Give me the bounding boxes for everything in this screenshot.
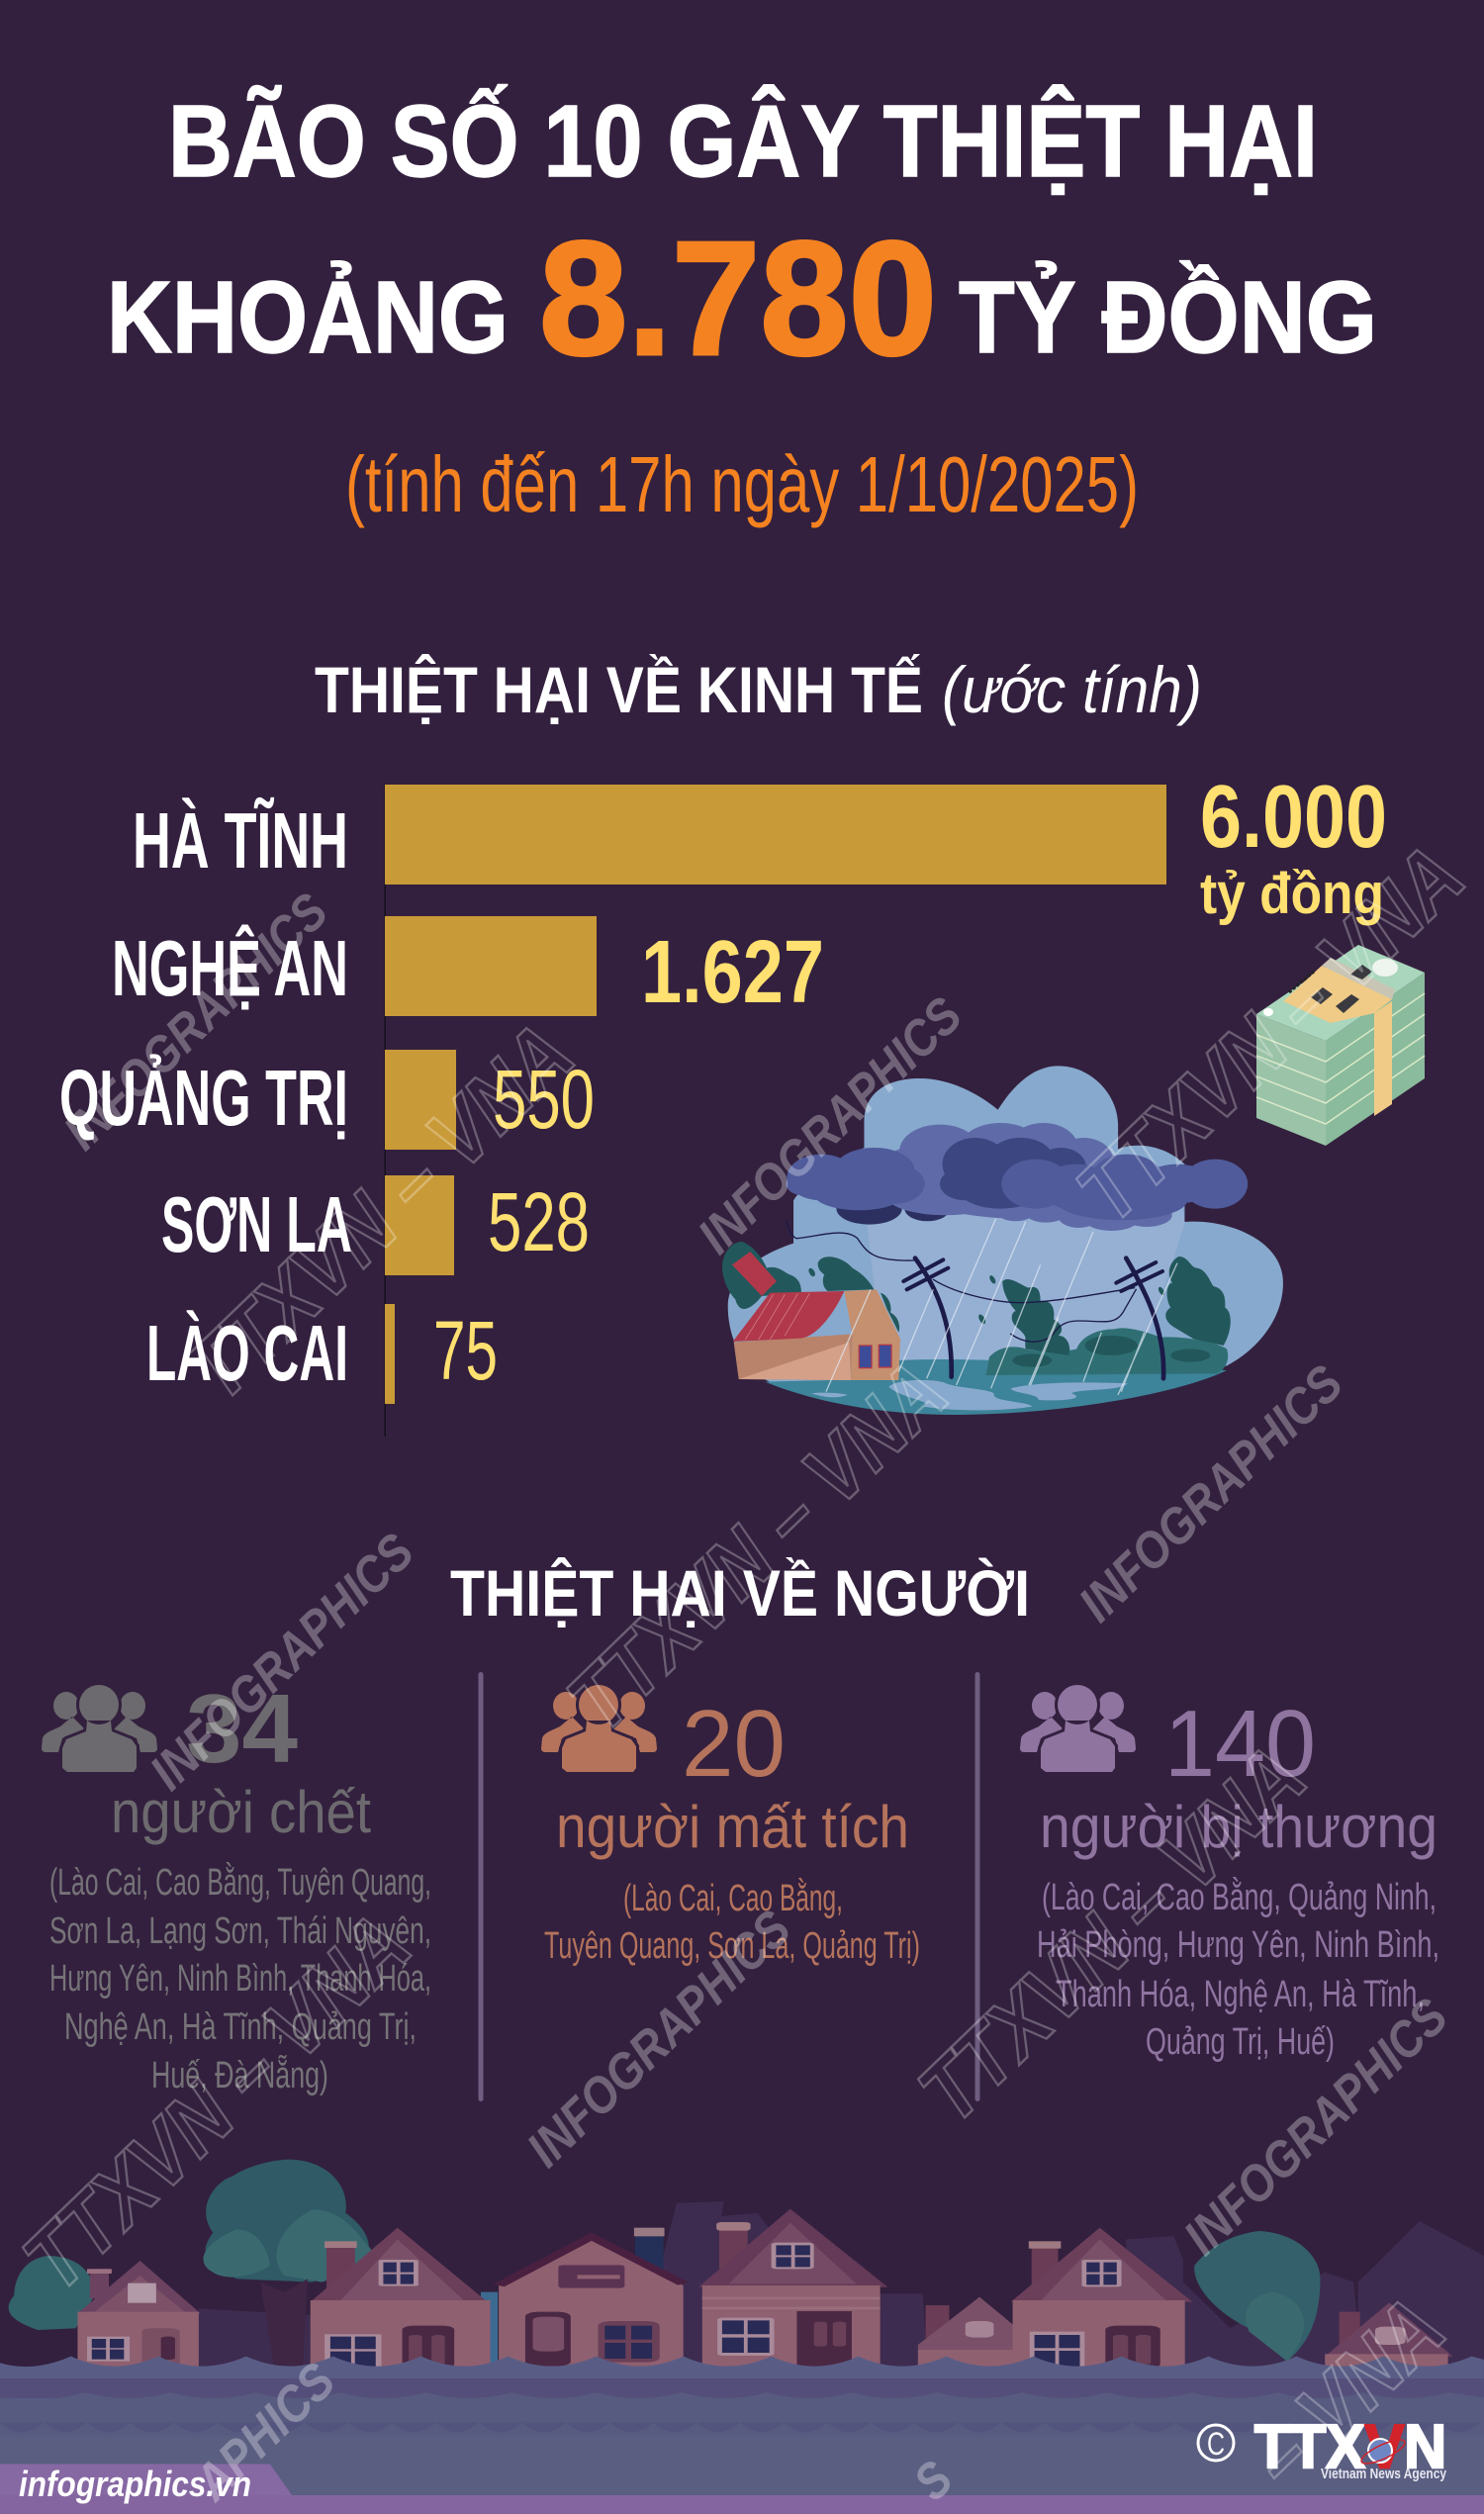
chart axis xyxy=(384,785,386,1437)
panel: missing xyxy=(541,1685,920,1967)
watermarks: INFOGRAPHICS xyxy=(139,1523,425,1802)
puddles xyxy=(811,1380,1128,1410)
label: deaths: người chết xyxy=(111,1779,371,1845)
sky blob xyxy=(728,1066,1283,1413)
background silhouettes xyxy=(199,2201,1484,2368)
province list: deaths xyxy=(49,1861,431,2096)
bar: Sơn La: 528 xyxy=(488,1175,590,1268)
watermarks: – VNA xyxy=(1231,2279,1463,2507)
label: missing: người mất tích xyxy=(556,1794,909,1860)
bar: Nghệ An: NGHỆ AN xyxy=(112,924,348,1012)
heading estimate note: (ước tính) xyxy=(942,653,1202,726)
house 2 xyxy=(311,2228,491,2368)
footer purple strip xyxy=(0,2495,1484,2514)
icon: people group xyxy=(541,1685,657,1772)
number: 140: 140 xyxy=(1164,1691,1316,1797)
house 4 xyxy=(698,2209,887,2368)
title highlighted total: 8.780 xyxy=(539,208,937,389)
province list: deaths: (Lào Cai, Cao Bằng, Tuyên Quang, xyxy=(49,1861,431,1904)
province list: deaths: Huế, Đà Nẵng) xyxy=(151,2053,328,2096)
label: injured: người bị thương xyxy=(1040,1794,1438,1860)
number: 20: 20 xyxy=(682,1691,786,1797)
rain xyxy=(826,1219,1177,1395)
province list: deaths: Sơn La, Lạng Sơn, Thái Nguyên, xyxy=(49,1910,431,1952)
heading: human damage: THIỆT HẠI VỀ NGƯỜI xyxy=(450,1556,1030,1629)
province list: missing: Tuyên Quang, Sơn La, Quảng Trị) xyxy=(544,1925,920,1967)
watermarks xyxy=(4,826,1482,2513)
wordmark: TTXVN xyxy=(1254,2413,1446,2481)
blue accent between houses xyxy=(481,2292,498,2367)
icon: people group xyxy=(1020,1685,1136,1772)
watermarks: TTXVN – VNA xyxy=(4,1895,428,2309)
column divider 1 xyxy=(479,1672,483,2101)
house xyxy=(732,1252,900,1380)
title line 2: khoảng: KHOẢNG xyxy=(107,260,509,374)
illustration: storm over flooded house xyxy=(722,1066,1283,1415)
subtitle date: (tính đến 17h ngày 1/10/2025) xyxy=(345,440,1139,528)
bar: Quảng Trị: QUẢNG TRỊ xyxy=(59,1054,348,1142)
watermarks: TTXVN – VNA xyxy=(899,1726,1324,2141)
illustration: flooded village xyxy=(0,2160,1484,2514)
storm clouds xyxy=(786,1123,1248,1231)
bar: Sơn La: SƠN LA xyxy=(161,1180,352,1268)
watermarks: INFOGRAPHICS xyxy=(516,1900,802,2179)
province list: injured: Quảng Trị, Huế) xyxy=(1146,2021,1335,2063)
province list: deaths: Hưng Yên, Ninh Bình, Thanh Hóa, xyxy=(49,1958,431,2000)
heading: economic damage xyxy=(315,653,1202,726)
watermarks: INFOGRAPHICS xyxy=(688,986,974,1265)
watermarks: INFOGRAPHICS xyxy=(53,883,339,1162)
heading text: THIỆT HẠI VỀ KINH TẾ xyxy=(315,653,923,726)
house 1 xyxy=(77,2261,201,2368)
number: 34: 34 xyxy=(186,1674,298,1783)
globe emblem xyxy=(1358,2436,1408,2467)
bar: Quảng Trị: 550 xyxy=(493,1053,595,1146)
flood water xyxy=(0,2357,1484,2514)
watermarks: TTXVN – VNA xyxy=(167,1004,592,1419)
bar chart: economic damage by province xyxy=(59,768,1387,1437)
bar: Sơn La xyxy=(161,1175,590,1275)
bar: Nghệ An: 1.627 xyxy=(641,923,824,1022)
panel: injured xyxy=(1020,1685,1439,2063)
copyright mark: C xyxy=(1207,2426,1225,2462)
title line 1: BÃO SỐ 10 GÂY THIỆT HẠI xyxy=(168,84,1318,198)
watermarks: INFOGRAPHICS xyxy=(1068,1354,1354,1633)
copyright mark xyxy=(1198,2425,1234,2462)
watermarks: S xyxy=(903,2451,964,2512)
bar: Hà Tĩnh: 6.000 xyxy=(1200,768,1387,867)
trees xyxy=(9,2160,1320,2368)
bar: Lào Cai: LÀO CAI xyxy=(146,1309,348,1397)
province list: injured xyxy=(1037,1876,1439,2063)
panel: deaths xyxy=(42,1674,431,2096)
title xyxy=(107,84,1377,389)
province list: missing: (Lào Cai, Cao Bằng, xyxy=(623,1877,843,1919)
bar: Hà Tĩnh xyxy=(133,768,1387,926)
column divider 2 xyxy=(975,1672,979,2101)
title line 2: tỷ đồng: TỶ ĐỒNG xyxy=(959,259,1377,374)
house 5 xyxy=(918,2297,1017,2368)
province list: deaths: Nghệ An, Hà Tĩnh, Quảng Trị, xyxy=(64,2006,417,2048)
icon: stack of money xyxy=(1256,945,1425,1146)
bar: Nghệ An xyxy=(112,916,824,1022)
watermarks: APHICS xyxy=(183,2352,346,2513)
ground scene: water, trees, house, poles xyxy=(722,1219,1231,1415)
house 6 xyxy=(1011,2228,1192,2368)
bar: Lào Cai: 75 xyxy=(433,1304,498,1397)
bar: Hà Tĩnh: tỷ đồng xyxy=(1200,862,1384,926)
watermarks: TTXVN – VNA xyxy=(548,1343,966,1750)
bar: Hà Tĩnh: HÀ TĨNH xyxy=(133,796,348,885)
trees and bushes xyxy=(722,1242,1231,1375)
province list: missing xyxy=(544,1877,920,1967)
logo: TTXVN xyxy=(1198,2413,1447,2482)
icon: people group xyxy=(42,1685,157,1772)
agency tagline: Vietnam News Agency xyxy=(1321,2466,1447,2482)
power poles and wires xyxy=(787,1222,1163,1378)
house 7 xyxy=(1325,2302,1452,2368)
flood water xyxy=(765,1359,1227,1415)
footer site tag: infographics.vn xyxy=(19,2464,251,2504)
house 3 xyxy=(499,2228,684,2368)
